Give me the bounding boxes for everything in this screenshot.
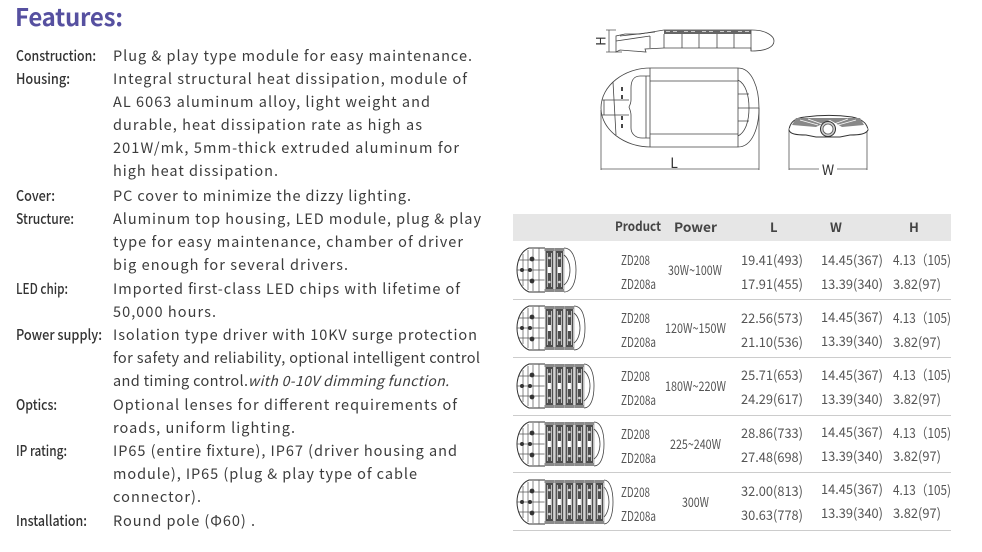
feature: housing	[16, 68, 468, 181]
feature: construction: Construction:	[16, 45, 96, 66]
row: 225~240W: 28.86(733)	[741, 422, 803, 442]
row: 120W~150W: 13.39(340)	[821, 330, 883, 350]
row: 300W: 32.00(813)	[741, 480, 803, 500]
row: 120W~150W: ZD208	[621, 307, 650, 327]
feature: power supply: for safety and reliability, optional intelligent control	[113, 347, 480, 368]
icon: 6-module fixture	[517, 480, 613, 524]
row: 30W~100W: 30W~100W	[668, 259, 722, 279]
feature: IP rating	[16, 440, 457, 507]
feature: housing: Housing:	[16, 68, 70, 89]
feature: installation	[16, 510, 255, 531]
row: 300W: 4.13（105)	[893, 479, 951, 499]
row: 180W~220W: 13.39(340)	[821, 388, 883, 408]
row: 30W~100W: 3.82(97)	[893, 273, 941, 293]
row: 225~240W	[517, 421, 951, 467]
row: 120W~150W: 22.56(573)	[741, 307, 803, 327]
table: product dimensions	[513, 214, 951, 530]
row: 30W~100W: ZD208	[621, 249, 650, 269]
row: 300W: 300W	[682, 491, 709, 511]
row: 225~240W: 13.39(340)	[821, 445, 883, 465]
icon: 3-module fixture	[517, 306, 585, 350]
row: 30W~100W: ZD208a	[621, 273, 656, 293]
diagram: top view with L dimension: L	[670, 153, 678, 173]
panel: features list	[16, 45, 481, 531]
feature: structure: Aluminum top housing, LED module, plug & play	[113, 208, 481, 229]
table header	[513, 214, 951, 241]
row: 300W	[517, 478, 951, 525]
feature: power supply: with 0-10V dimming function.	[248, 371, 449, 391]
feature: power supply	[16, 324, 480, 391]
row: 30W~100W: 13.39(340)	[821, 273, 883, 293]
feature: structure: Structure:	[16, 208, 74, 229]
row: 120W~150W	[517, 306, 951, 351]
row: 30W~100W: 4.13（105)	[893, 249, 951, 269]
row: 300W: 13.39(340)	[821, 502, 883, 522]
feature: IP rating: IP65 (entire fixture), IP67 (driver housing and	[113, 440, 457, 461]
diagram: front view with W dimension: W	[822, 160, 834, 180]
feature: LED chip	[16, 278, 461, 322]
feature: LED chip: LED chip:	[16, 278, 68, 299]
feature: structure: type for easy maintenance, chamber of driver	[113, 231, 463, 252]
row: 300W: 14.45(367)	[821, 478, 883, 498]
feature: power supply: Isolation type driver with 10KV surge protection	[113, 324, 477, 345]
feature: housing: AL 6063 aluminum alloy, light weight and	[113, 91, 430, 112]
feature: construction: Plug & play type module for easy maintenance.	[113, 45, 472, 66]
feature: IP rating: IP rating:	[16, 440, 67, 461]
feature: housing: 201W/mk, 5mm-thick extruded aluminum for	[113, 137, 459, 158]
feature: IP rating: connector).	[113, 486, 201, 507]
feature: optics: Optional lenses for different requirements of	[113, 394, 458, 415]
icon: 2-module fixture	[517, 248, 576, 292]
feature: structure: big enough for several drivers.	[113, 254, 348, 275]
diagram: side view with H dimension: H	[591, 36, 610, 46]
row: 300W: ZD208a	[621, 505, 656, 525]
row: 225~240W: 3.82(97)	[893, 445, 941, 465]
feature: LED chip: 50,000 hours.	[113, 301, 216, 322]
feature: structure	[16, 208, 481, 275]
row: 180W~220W: 24.29(617)	[741, 388, 803, 408]
row: 180W~220W: 25.71(653)	[741, 364, 803, 384]
row: 225~240W: 14.45(367)	[821, 421, 883, 441]
row: 300W: 3.82(97)	[893, 502, 941, 522]
row: 120W~150W: 4.13（105)	[893, 307, 951, 327]
feature: installation: Round pole (Φ60) .	[113, 510, 255, 531]
feature: cover: Cover:	[16, 185, 55, 206]
row: 120W~150W: 21.10(536)	[741, 331, 803, 351]
row: 225~240W: 225~240W	[670, 433, 721, 453]
row: 30W~100W: 19.41(493)	[741, 249, 803, 269]
row: 225~240W: 27.48(698)	[741, 446, 803, 466]
row: 120W~150W: ZD208a	[621, 331, 656, 351]
icon: 4-module fixture	[517, 364, 594, 408]
table header: Product	[615, 216, 661, 235]
icon: 5-module fixture	[517, 422, 604, 466]
row: 180W~220W: 4.13（105)	[893, 364, 951, 384]
row: 300W: 30.63(778)	[741, 504, 803, 524]
feature: cover: PC cover to minimize the dizzy lighting.	[113, 185, 411, 206]
row: 180W~220W: 180W~220W	[665, 375, 726, 395]
row: 225~240W: ZD208	[621, 423, 650, 443]
row: 180W~220W: ZD208	[621, 365, 650, 385]
row: 30W~100W	[517, 248, 951, 293]
row: 180W~220W	[517, 364, 951, 409]
feature: power supply: and timing control.	[113, 370, 248, 391]
row: 120W~150W: 3.82(97)	[893, 331, 941, 351]
row: 225~240W: ZD208a	[621, 447, 656, 467]
feature: power supply: Power supply:	[16, 324, 102, 345]
row: 30W~100W: 14.45(367)	[821, 249, 883, 269]
diagram: top view with L dimension	[601, 68, 759, 173]
feature: housing: durable, heat dissipation rate as high as	[113, 114, 422, 135]
table header: L	[770, 217, 778, 236]
table header: H	[909, 217, 919, 236]
row: 225~240W: 4.13（105)	[893, 422, 951, 442]
feature: housing: high heat dissipation.	[113, 160, 278, 181]
diagram: front view with W dimension	[789, 116, 868, 180]
row: 180W~220W: 14.45(367)	[821, 364, 883, 384]
feature: installation: Installation:	[16, 510, 87, 531]
feature: optics: Optics:	[16, 394, 57, 415]
row: 120W~150W: 14.45(367)	[821, 306, 883, 326]
row: 30W~100W: 17.91(455)	[741, 273, 803, 293]
feature: optics	[16, 394, 458, 438]
feature: optics: roads, uniform lighting.	[113, 417, 295, 438]
row: 300W: ZD208	[621, 481, 650, 501]
feature: housing: Integral structural heat dissipation, module of	[113, 68, 468, 89]
diagram: side view with H dimension	[591, 30, 774, 52]
feature: LED chip: Imported first-class LED chips with lifetime of	[113, 278, 461, 299]
row: 180W~220W: 3.82(97)	[893, 388, 941, 408]
feature: IP rating: module), IP65 (plug & play type of cable	[113, 463, 417, 484]
row: 120W~150W: 120W~150W	[665, 317, 726, 337]
table header: Power	[674, 217, 717, 236]
row: 180W~220W: ZD208a	[621, 389, 656, 409]
table header: W	[830, 217, 842, 236]
